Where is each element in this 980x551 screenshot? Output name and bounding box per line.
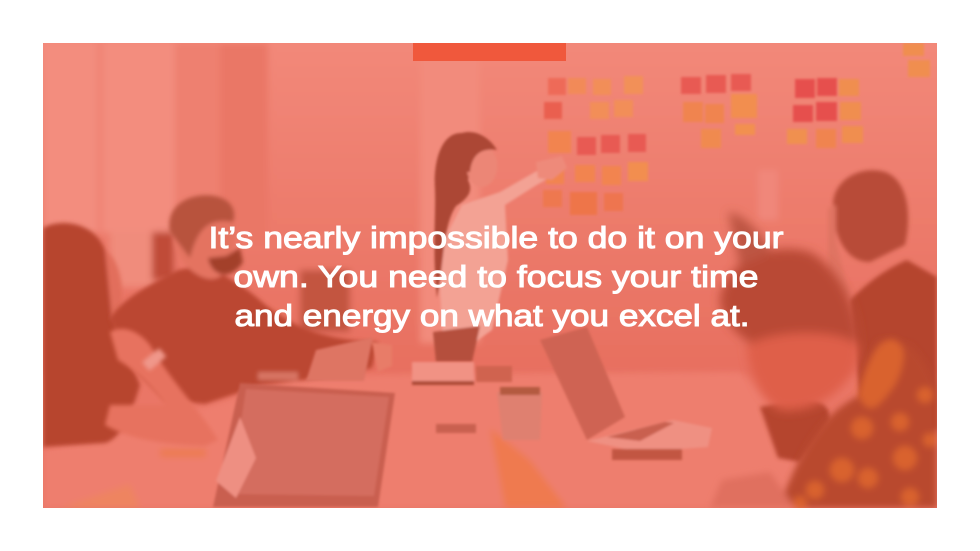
sticky notes on the wall: [543, 43, 930, 215]
man on right facing away: [760, 170, 937, 462]
headline text: [208, 220, 784, 333]
presenter: [433, 132, 567, 362]
table: [43, 372, 800, 508]
top accent bar: [413, 43, 566, 61]
small laptop and table items: [306, 337, 542, 440]
back wall and window: [43, 43, 937, 344]
left woman arm with bracelet: [105, 329, 218, 446]
plaid shirt: [710, 339, 937, 510]
open laptop on right: [540, 327, 712, 460]
laptop in the foreground: [213, 383, 395, 507]
headline text: and energy on what you excel at.: [234, 298, 750, 333]
bearded man in dark shirt: [110, 195, 378, 404]
blurred person: hair and face: [720, 212, 859, 410]
headline text: It’s nearly impossible to do it on your: [208, 220, 784, 255]
headline text: own. You need to focus your time: [234, 259, 758, 294]
person left with long hair: [43, 223, 140, 447]
